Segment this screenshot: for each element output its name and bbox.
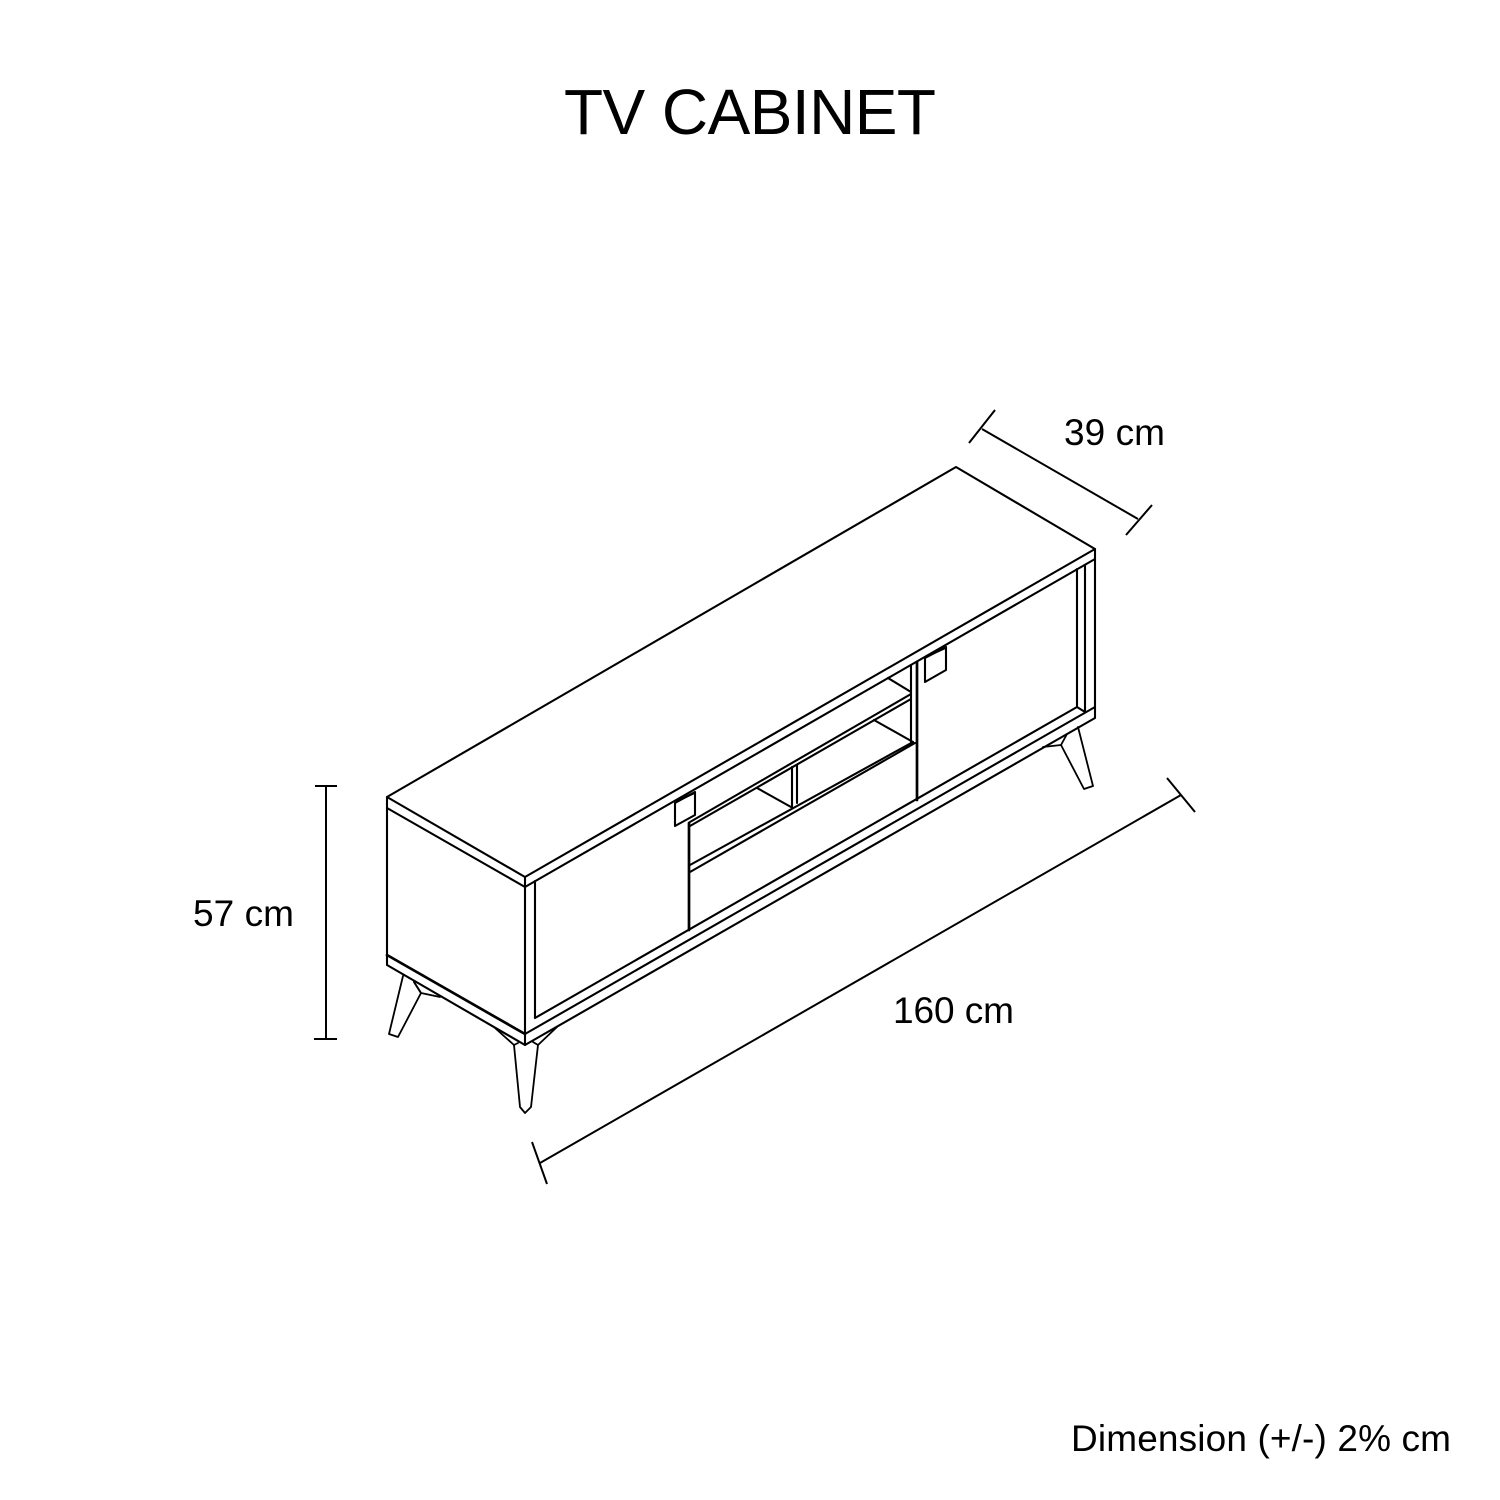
dimension: height 57 cm <box>314 786 337 1039</box>
title: TV CABINET <box>564 76 936 148</box>
left door edge <box>688 823 690 930</box>
left leg <box>389 976 440 1037</box>
right door handle <box>925 647 946 682</box>
dimension: depth 39 cm <box>969 410 1152 535</box>
depth label: 39 cm <box>1064 412 1165 453</box>
right leg <box>1043 727 1093 789</box>
open shelves <box>690 665 915 872</box>
right door edge <box>916 662 918 800</box>
height label: 57 cm <box>193 893 294 934</box>
footnote: Dimension (+/-) 2% cm <box>1071 1418 1451 1459</box>
cabinet side panel <box>387 808 525 1045</box>
cabinet front frame <box>525 559 1095 1045</box>
left door handle <box>675 792 695 826</box>
width label: 160 cm <box>893 990 1014 1031</box>
dimension: width 160 cm <box>532 778 1195 1184</box>
cabinet top panel <box>387 467 1095 887</box>
illustration: TV cabinet <box>387 467 1095 1113</box>
front leg <box>495 1027 557 1113</box>
